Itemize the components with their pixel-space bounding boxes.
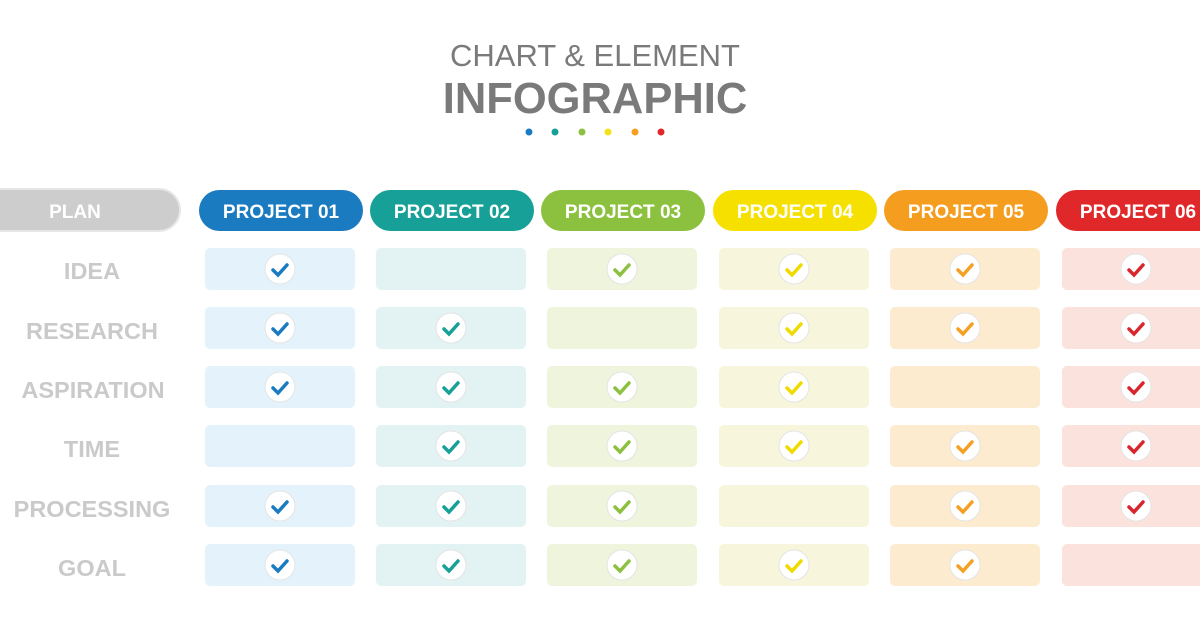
row labels: IDEA bbox=[64, 258, 120, 284]
title: CHART & ELEMENT bbox=[450, 38, 740, 73]
column: project 03 bbox=[541, 190, 705, 586]
column: project 02: PROJECT 02 bbox=[394, 202, 510, 223]
column: project 06: PROJECT 06 bbox=[1080, 202, 1196, 223]
row labels: PROCESSING bbox=[14, 496, 170, 522]
title bbox=[443, 38, 747, 123]
column: project 05 bbox=[884, 190, 1048, 586]
column: project 01 bbox=[199, 190, 363, 586]
row labels: ASPIRATION bbox=[21, 377, 165, 403]
column: project 02 bbox=[370, 190, 534, 586]
plan header pill bbox=[0, 189, 180, 231]
title: INFOGRAPHIC bbox=[443, 75, 747, 123]
column: project 01: PROJECT 01 bbox=[223, 202, 340, 223]
column: project 03: PROJECT 03 bbox=[565, 202, 681, 223]
row labels bbox=[14, 258, 170, 581]
column: project 04: PROJECT 04 bbox=[737, 202, 854, 223]
row labels: RESEARCH bbox=[26, 318, 158, 344]
color dots bbox=[526, 128, 664, 136]
row labels: GOAL bbox=[58, 555, 126, 581]
row labels: TIME bbox=[64, 436, 120, 462]
column: project 05: PROJECT 05 bbox=[908, 202, 1025, 223]
plan header pill: PLAN bbox=[49, 202, 101, 223]
column: project 04 bbox=[713, 190, 877, 586]
column: project 06 bbox=[1056, 190, 1200, 586]
